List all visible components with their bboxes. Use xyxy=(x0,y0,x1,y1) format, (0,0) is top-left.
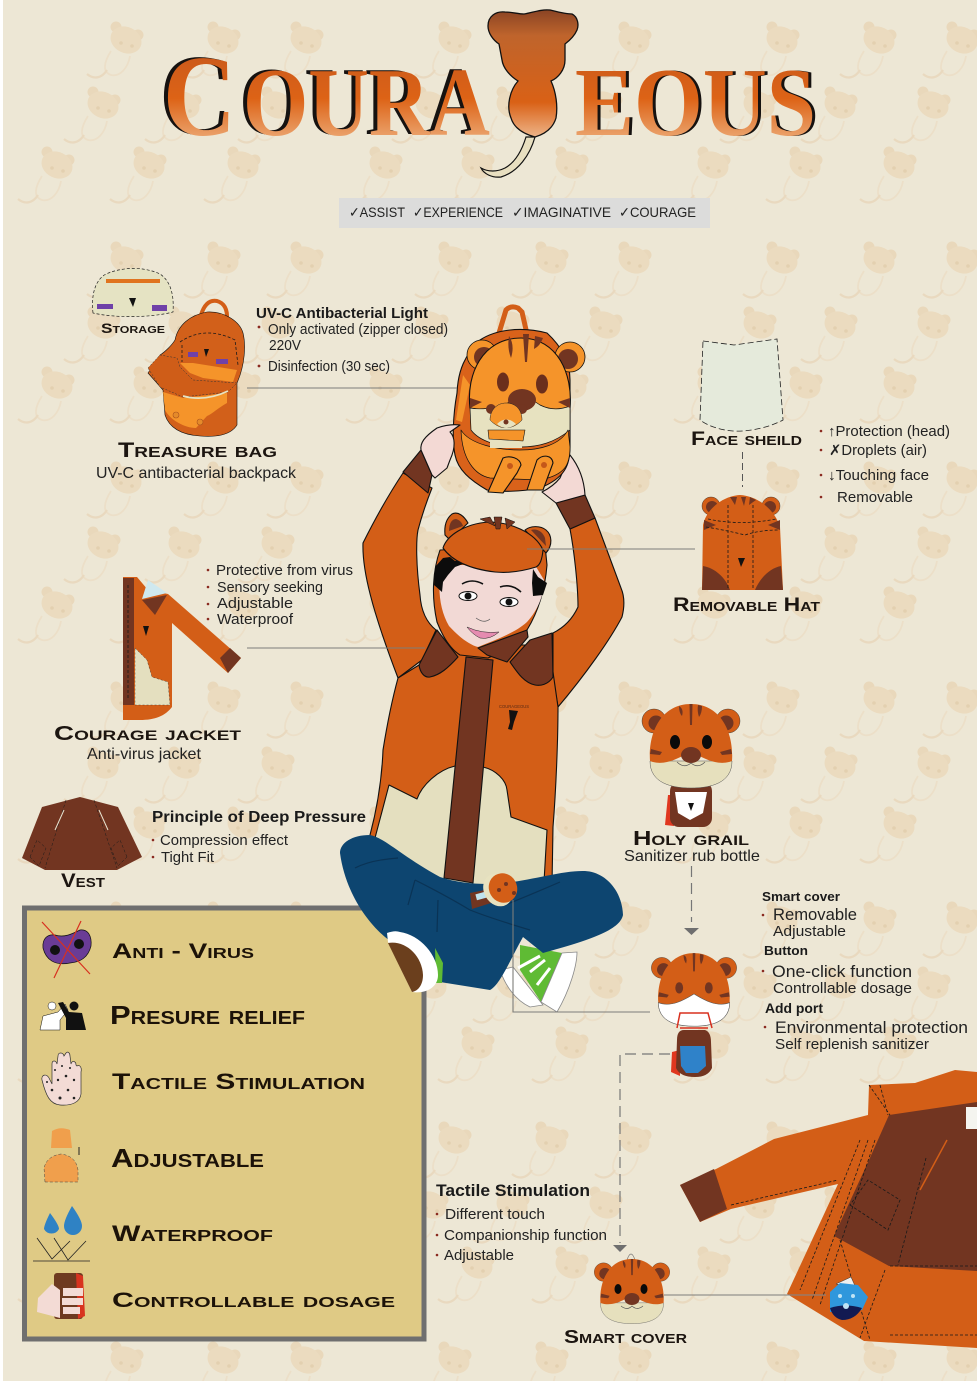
panel: removable hat xyxy=(673,495,820,616)
text block: smart cover features: Button xyxy=(764,943,808,958)
tagline bar: ✓IMAGINATIVE xyxy=(512,204,611,220)
text block: smart cover features: Controllable dosage xyxy=(773,980,912,997)
right shoe xyxy=(500,945,577,1012)
panel: face shield xyxy=(691,339,802,450)
heading: Treasure bag: Treasure bag xyxy=(118,439,277,462)
icon: smart cover tiger xyxy=(594,1254,670,1324)
jacket logo: COURAGEOUS xyxy=(499,704,529,709)
text block: smart cover features: Smart cover xyxy=(762,889,840,904)
label: Tactile Stimulation: Tactile Stimulation xyxy=(112,1069,365,1094)
trousers xyxy=(340,835,623,990)
text block: UV-C antibacterial light xyxy=(256,306,448,375)
illustration: tiger backpack xyxy=(453,307,585,493)
text block: jacket features: Waterproof xyxy=(217,612,294,628)
text block: tactile stimulation: Companionship function xyxy=(444,1228,607,1244)
text block: jacket features: Adjustable xyxy=(217,596,293,612)
icon: face shield xyxy=(700,339,783,431)
text block: smart cover features: Self replenish sanitizer xyxy=(775,1037,929,1053)
dashed link shield to hat xyxy=(742,452,744,487)
icon: vest xyxy=(22,797,142,870)
text block: tactile stimulation xyxy=(436,1182,607,1264)
icon: courage jacket xyxy=(123,577,241,720)
text block: tactile stimulation: Different touch xyxy=(445,1207,545,1223)
dashed arrow: bottle to cross-section xyxy=(684,866,699,935)
cream belly panel xyxy=(375,766,547,887)
icon: storage pouch xyxy=(93,268,173,317)
label: Presure relief: Presure relief xyxy=(110,1000,305,1030)
hood xyxy=(433,545,547,658)
text block: UV-C antibacterial light: 220V xyxy=(269,338,301,354)
icon: hanging smart cover xyxy=(830,1277,868,1320)
title text left xyxy=(163,33,490,161)
icon: cat silhouette xyxy=(481,10,578,177)
panel: holy grail bottle: Holy grail xyxy=(633,828,750,850)
label: Adjustable: Adjustable xyxy=(111,1145,264,1173)
icon: adjustable hat xyxy=(44,1128,79,1182)
text block: smart cover features: Adjustable xyxy=(773,924,846,940)
text block: face shield features: Removable xyxy=(837,490,913,506)
icon: anti virus xyxy=(42,921,91,978)
title text right: EOUS xyxy=(575,49,816,157)
collar lapels xyxy=(419,630,553,685)
tagline bar: ✓EXPERIENCE xyxy=(413,204,503,220)
heading: Treasure bag xyxy=(96,439,297,482)
panel: smart cover: Smart cover xyxy=(564,1326,688,1347)
text block: face shield features: ↓Touching face xyxy=(828,468,929,484)
illustration: boy in courage jacket xyxy=(363,455,624,887)
text block: principle of deep pressure: Tight Fit xyxy=(161,850,214,866)
text block: face shield features xyxy=(820,424,950,506)
label: Waterproof: Waterproof xyxy=(112,1221,273,1246)
text block: principle of deep pressure xyxy=(152,809,366,866)
panel: holy grail bottle xyxy=(624,704,760,865)
left shoe xyxy=(387,931,443,992)
tagline bar: ✓COURAGE xyxy=(619,204,696,220)
text block: smart cover features: Add port xyxy=(765,1001,824,1016)
left hand on backpack xyxy=(403,425,460,493)
panel: holy grail bottle: Sanitizer rub bottle xyxy=(624,848,760,865)
text block: smart cover features xyxy=(762,889,968,1053)
title: Courageous logo xyxy=(163,10,816,177)
centre placket xyxy=(444,657,493,883)
text block: tactile stimulation: Tactile Stimulation xyxy=(436,1182,590,1200)
title text left: OURA xyxy=(243,49,490,157)
text block: UV-C antibacterial light: Disinfection (30 sec) xyxy=(268,359,390,375)
text block: principle of deep pressure: Principle of Deep Pressure xyxy=(152,809,366,826)
face xyxy=(434,557,547,647)
panel: vest xyxy=(22,797,142,892)
heading: Treasure bag: UV-C antibacterial backpack xyxy=(96,465,297,482)
panel: storage xyxy=(93,268,173,336)
text block: tactile stimulation: Adjustable xyxy=(444,1248,514,1264)
icon: removable hat xyxy=(702,495,783,590)
panel: storage: Storage xyxy=(101,320,165,336)
panel: removable hat: Removable Hat xyxy=(673,595,820,616)
hood cap with ears xyxy=(443,513,551,572)
small tiger bottle on lap xyxy=(470,868,523,912)
label: Anti-Virus: Anti - Virus xyxy=(112,939,254,963)
text block: principle of deep pressure: Compression effect xyxy=(160,833,288,849)
trousers and shoes xyxy=(340,835,623,1012)
text block: smart cover features: One-click function xyxy=(772,962,912,981)
text block: smart cover features: Removable xyxy=(773,906,857,924)
torso xyxy=(370,645,558,885)
backpack legs xyxy=(488,457,521,493)
icon: tactile hand xyxy=(42,1052,81,1105)
icon: holy grail bottle xyxy=(642,704,740,827)
left sleeve xyxy=(363,473,436,678)
panel: face shield: Face sheild xyxy=(691,429,802,450)
panel legend xyxy=(24,908,424,1339)
illustration: jacket with smart cover closeup xyxy=(680,1070,977,1348)
text block: jacket features: Sensory seeking xyxy=(217,580,323,596)
text block: smart cover features: Environmental protection xyxy=(775,1018,968,1037)
text block: jacket features: Protective from virus xyxy=(216,563,353,579)
panel: smart cover xyxy=(564,1254,688,1347)
text block: face shield features: ↑Protection (head) xyxy=(828,424,950,440)
icon: waterproof drops xyxy=(33,1206,90,1261)
dashed arrow: cross-section to smart cover xyxy=(613,1054,670,1252)
icon: pressure relief xyxy=(40,1002,86,1030)
label: Controllable dosage: Controllable dosage xyxy=(112,1288,395,1312)
right sleeve and hand xyxy=(542,455,624,707)
panel: vest: Vest xyxy=(61,871,105,892)
tagline bar: ✓ASSIST xyxy=(349,204,405,220)
connector lines xyxy=(247,388,826,1295)
jacket logo xyxy=(499,704,529,730)
mini tiger on backpack xyxy=(486,403,527,448)
panel: courage jacket: Courage jacket xyxy=(54,722,242,745)
icon: open treasure bag xyxy=(148,301,245,436)
text block: jacket features xyxy=(207,563,353,628)
panel: courage jacket xyxy=(54,577,242,763)
panel: courage jacket: Anti-virus jacket xyxy=(87,746,202,763)
icon: bottle cross-section with mask xyxy=(651,953,737,1077)
icon: hand holding bottle xyxy=(37,1273,85,1319)
text block: UV-C antibacterial light: Only activated (zipper closed) xyxy=(268,322,448,338)
tagline bar xyxy=(339,198,710,228)
text block: UV-C antibacterial light: UV-C Antibacterial Light xyxy=(256,306,428,322)
text block: face shield features: ✗Droplets (air) xyxy=(829,443,927,459)
title text left: C xyxy=(163,33,236,161)
